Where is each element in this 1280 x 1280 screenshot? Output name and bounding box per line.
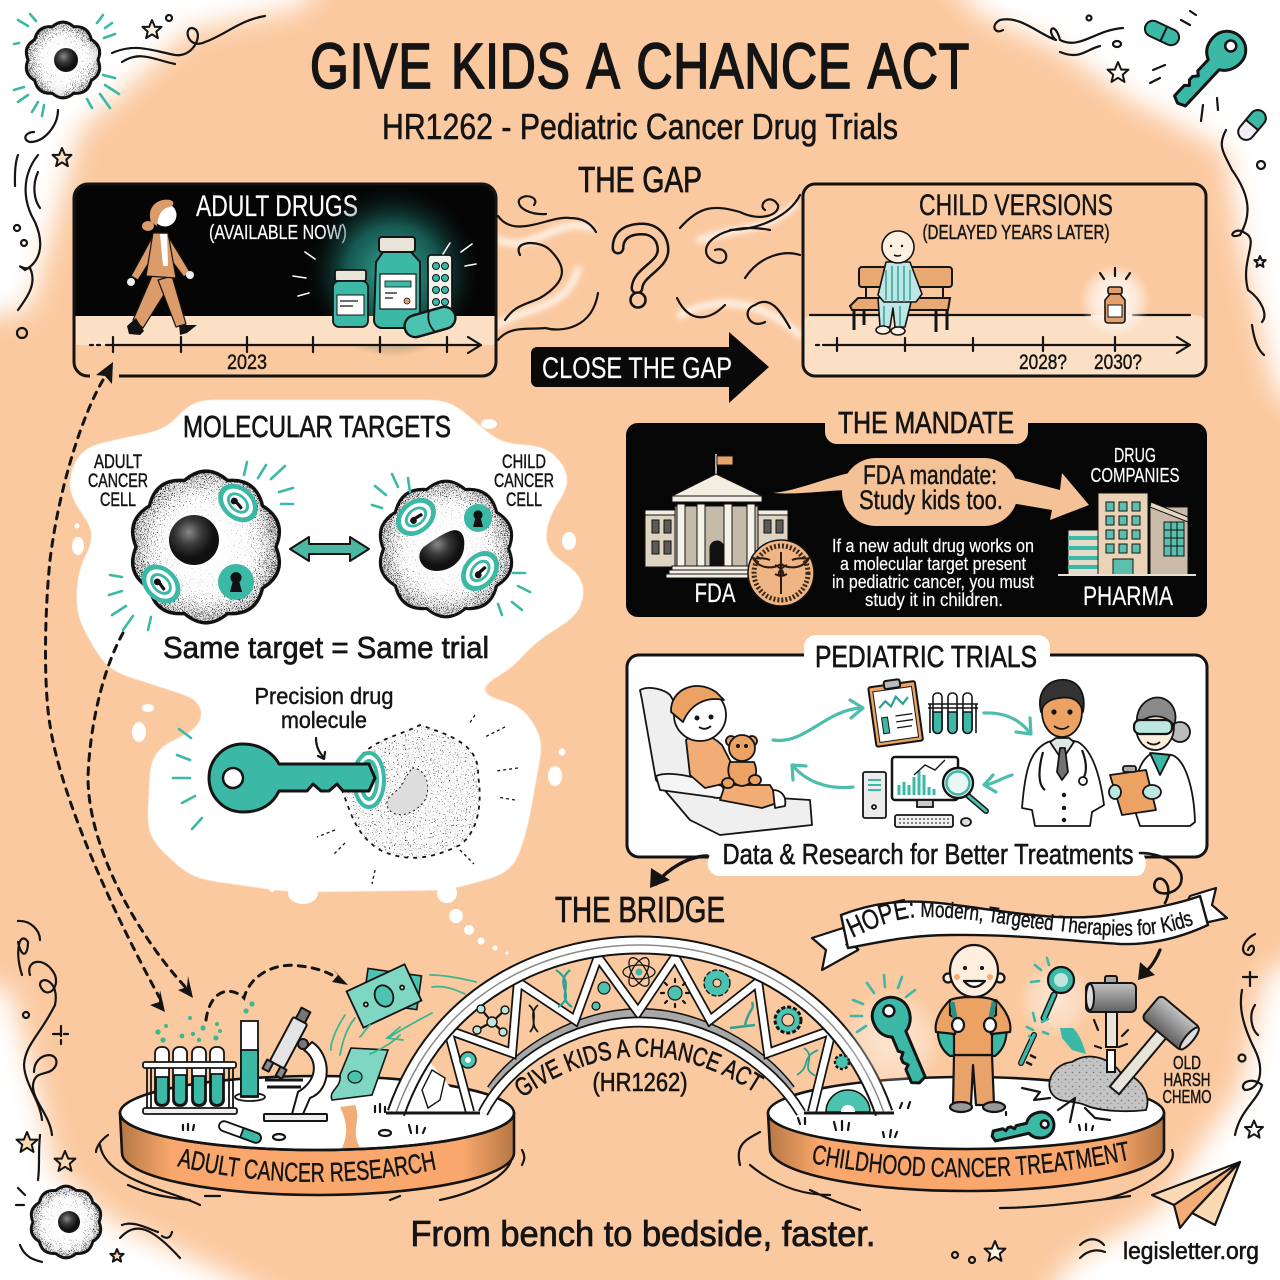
icon: adult cancer cell	[109, 462, 293, 630]
icon: magnifying glass	[943, 768, 986, 811]
icon: child with backpack	[936, 945, 1010, 1112]
text: mandate explanation: study it in children.	[865, 590, 1003, 610]
decoration: top-right corner key, pills and doodles	[994, 11, 1269, 355]
label: child cancer cell: CHILD	[502, 452, 546, 473]
label: childhood cancer treatment: CHILDHOOD CANCER TREATMENT	[813, 1141, 1128, 1178]
icon: seal with caduceus	[748, 540, 814, 606]
truss icons: science symbols	[422, 955, 870, 1112]
panel: pediatric trials	[627, 635, 1207, 876]
panel: adult drugs	[74, 184, 496, 376]
heading: the mandate: THE MANDATE	[838, 405, 1014, 440]
icon: capsule	[402, 304, 458, 340]
label: FDA: FDA	[694, 578, 736, 608]
dashed connector arrows	[46, 380, 344, 1020]
icon: broken key	[1021, 1013, 1048, 1065]
label: child cancer cell: CELL	[506, 490, 542, 511]
icon: tube rack	[143, 1047, 237, 1114]
panel: child versions	[803, 184, 1206, 376]
heading: child versions: CHILD VERSIONS	[919, 189, 1113, 222]
swirls around the gap	[498, 195, 800, 340]
caption: available now: (AVAILABLE NOW)	[209, 222, 347, 244]
banner text: HOPE: Modern, Targeted Therapies for Kids	[846, 898, 1193, 940]
top chord	[396, 945, 884, 1113]
icon: child in infusion chair with teddy bear	[640, 686, 812, 835]
truss members	[448, 957, 832, 1112]
arrow: mandate	[773, 473, 1089, 520]
label: pharma: PHARMA	[1083, 581, 1173, 611]
icon: blister pack	[428, 255, 452, 313]
heading: pediatric trials: PEDIATRIC TRIALS	[815, 639, 1037, 674]
label: old harsh chemo: OLD	[1173, 1053, 1201, 1073]
heading: adult drugs: ADULT DRUGS	[196, 190, 358, 223]
icon: doctor	[1022, 680, 1104, 826]
label: old harsh chemo: CHEMO	[1162, 1087, 1212, 1107]
icon: child cancer cell	[372, 474, 530, 617]
icon: tube on the ground	[218, 1120, 262, 1144]
bridge: give kids a chance act	[386, 936, 894, 1116]
icon: pharma buildings	[1058, 493, 1196, 576]
icon: precision key	[173, 729, 375, 829]
icon: child in pajamas	[876, 231, 922, 335]
arrow: close the gap	[531, 332, 769, 403]
bubbles over tubes	[155, 1001, 255, 1043]
decoration: top-left corner cell and doodles	[14, 14, 265, 338]
hammer upright	[1086, 976, 1136, 1072]
decoration: bottom-left corner cell and doodles	[16, 921, 180, 1262]
arrows: teal care loop	[773, 700, 1031, 792]
arrow: to key	[316, 738, 325, 759]
deck chord	[483, 1022, 801, 1113]
icon: small pill bottle	[333, 270, 368, 327]
text: FDA mandate: FDA mandate:	[863, 460, 997, 490]
icon: flying money	[331, 964, 476, 1100]
label: drug companies: COMPANIES	[1090, 465, 1180, 487]
icon: clipboard	[868, 677, 923, 747]
hammer tilted	[1095, 995, 1202, 1108]
text: FDA mandate	[859, 460, 1003, 515]
icon: lab nurse with clipboard	[1109, 697, 1195, 826]
arch sublabel: (HR1262)	[592, 1067, 688, 1097]
icon: large pill bottle	[374, 237, 420, 328]
label: precision drug molecule: molecule	[281, 707, 367, 733]
deck stipple band	[492, 1014, 790, 1090]
label: old harsh chemo: HARSH	[1164, 1070, 1210, 1090]
heading: the bridge: THE BRIDGE	[555, 889, 725, 930]
bottom tab	[708, 847, 1146, 876]
icon: teal key with magnifier head	[1031, 958, 1074, 1018]
text: mandate explanation	[832, 536, 1034, 610]
icon: rubble with broken chemo hammers	[1022, 976, 1202, 1122]
icon: test tube rack	[928, 693, 978, 734]
label: adult cancer cell: ADULT	[94, 452, 142, 473]
text: same target same trial: Same target = Same trial	[163, 630, 489, 665]
year label: 2030: 2030?	[1094, 351, 1142, 374]
arrowhead: data to bridge	[650, 868, 670, 888]
icon: distant glowing vial	[1079, 264, 1151, 336]
icon: big teal key	[851, 975, 937, 1090]
pebbles and grass	[183, 1104, 425, 1140]
label: adult cancer research: ADULT CANCER RESEARCH	[176, 1148, 436, 1182]
ghost cell	[317, 715, 518, 884]
label: child cancer cell: CANCER	[494, 471, 554, 492]
text: mandate explanation: If a new adult drug works on	[832, 536, 1034, 556]
arrow: data to bridge	[656, 856, 707, 884]
banner: hope	[810, 886, 1228, 972]
panel: molecular targets cloud	[68, 402, 584, 954]
heading: the gap: THE GAP	[578, 159, 702, 200]
icon: microscope	[262, 1005, 327, 1121]
arrow: key to rubble	[1060, 1028, 1086, 1054]
arrow: two-way link	[290, 537, 369, 561]
icon: bench	[850, 267, 952, 332]
platform: childhood cancer treatment	[766, 1076, 1166, 1192]
text: mandate explanation: a molecular target present	[840, 554, 1026, 574]
label: drug companies: DRUG	[1114, 445, 1156, 467]
callout bubble	[842, 458, 1018, 526]
arrow: close the gap: CLOSE THE GAP	[542, 352, 732, 385]
caption: data and research: Data & Research for Better Treatments	[722, 839, 1134, 871]
timeline axis	[816, 337, 1190, 374]
subtitle: HR1262 - Pediatric Cancer Drug Trials	[382, 106, 898, 147]
platform: adult cancer research	[118, 1001, 516, 1196]
title tab	[825, 423, 1028, 444]
icon: computer with chart	[863, 757, 971, 827]
label: adult cancer cell	[88, 452, 148, 511]
year label: 2023	[227, 351, 267, 374]
label: drug companies	[1090, 445, 1180, 487]
text: FDA mandate: Study kids too.	[859, 485, 1003, 515]
tagline: From bench to bedside, faster.	[410, 1213, 876, 1254]
label: adult cancer cell: CANCER	[88, 471, 148, 492]
caption: delayed years later: (DELAYED YEARS LATER)	[922, 222, 1110, 244]
glow behind the hope icons	[841, 962, 1094, 1092]
timeline axis	[90, 337, 481, 374]
heading: molecular targets: MOLECULAR TARGETS	[183, 409, 451, 444]
sparkle lines	[293, 243, 476, 296]
text: mandate explanation: in pediatric cancer, you must	[832, 572, 1034, 592]
panel: the mandate	[626, 405, 1207, 617]
arrow: data to hope banner	[1140, 853, 1182, 903]
question mark	[618, 229, 663, 308]
label: adult cancer cell: CELL	[100, 490, 136, 511]
icon: walking woman	[127, 200, 197, 335]
title: GIVE KIDS A CHANCE ACT	[310, 30, 970, 102]
target ring	[354, 753, 384, 807]
label: precision drug molecule	[254, 683, 394, 733]
foot stipple	[396, 1062, 470, 1113]
teal glow behind drugs	[308, 187, 478, 357]
label: old harsh chemo	[1162, 1053, 1212, 1107]
decoration: right edge doodles	[952, 934, 1263, 1263]
label: child cancer cell	[494, 452, 554, 511]
year label: 2028: 2028?	[1019, 351, 1067, 374]
icon: graduated cylinder	[235, 1021, 265, 1101]
dashed arrowheads	[96, 362, 348, 1012]
water ripples	[96, 1132, 1173, 1210]
arrow: banner to hammers	[1138, 950, 1160, 980]
title tab	[804, 635, 1050, 673]
icon: paper airplane	[1152, 1162, 1240, 1228]
label: precision drug molecule: Precision drug	[254, 683, 394, 709]
icon: key on the ground	[989, 1110, 1056, 1149]
arch label: GIVE KIDS A CHANCE ACT	[515, 1038, 765, 1096]
icon: FDA building	[645, 454, 788, 578]
grass marks	[798, 1102, 1093, 1137]
source: legisletter.org	[1123, 1238, 1259, 1265]
